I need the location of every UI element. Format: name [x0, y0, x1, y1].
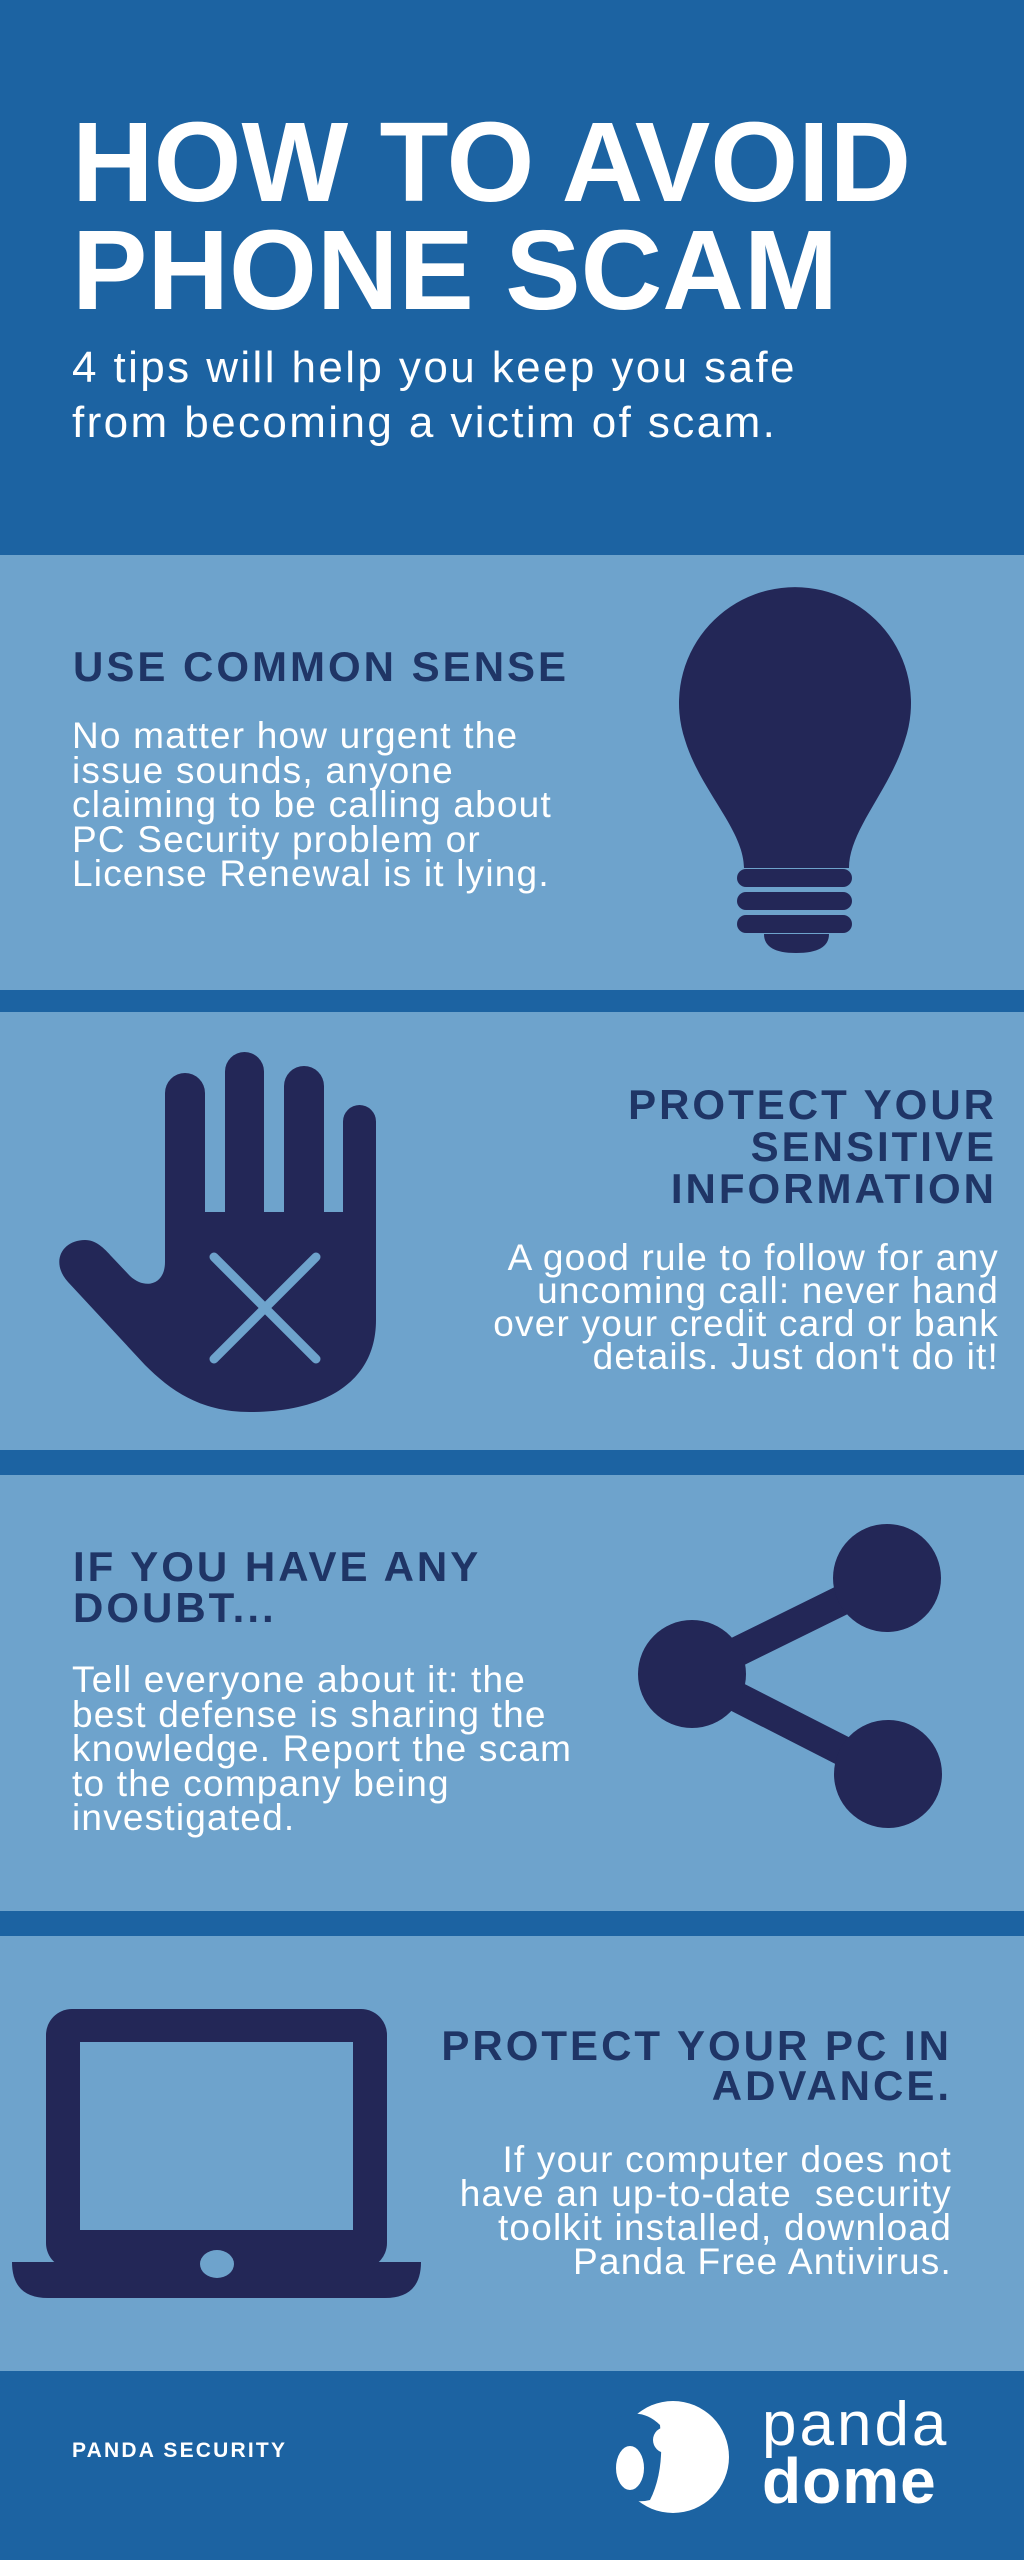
- heading: protect your pc: ADVANCE.: [712, 2062, 952, 2109]
- heading: protect your pc: [441, 2022, 952, 2109]
- header background: [0, 0, 1024, 555]
- heading: protect sensitive information: [628, 1081, 997, 1212]
- title: PHONE SCAM: [72, 207, 838, 333]
- text: sensitive information: details. Just don't do it!: [593, 1336, 999, 1377]
- text: doubt: Tell everyone about it: the: [72, 1659, 526, 1700]
- logo: panda dome: panda: [762, 2390, 949, 2459]
- text: protect pc: If your computer does not: [502, 2139, 952, 2180]
- divider strip: [0, 1911, 1024, 1936]
- text: doubt: best defense is sharing the: [72, 1694, 547, 1734]
- text: common sense: [72, 715, 552, 894]
- logo: panda dome: [616, 2390, 949, 2517]
- text: common sense: No matter how urgent the: [72, 715, 518, 756]
- text: protect pc: Panda Free Antivirus.: [573, 2241, 952, 2282]
- title: [72, 99, 911, 333]
- text: common sense: claiming to be calling about: [72, 784, 552, 825]
- text: sensitive information: A good rule to follow for any: [508, 1237, 999, 1278]
- text: common sense: License Renewal is it lying.: [72, 853, 550, 894]
- icon: laptop: [12, 2009, 421, 2298]
- divider strip: [0, 1450, 1024, 1475]
- text: sensitive information: uncoming call: never hand: [537, 1270, 999, 1311]
- subtitle: from becoming a victim of scam.: [72, 398, 777, 447]
- icon: light bulb: [679, 587, 911, 953]
- heading: use common sense: USE COMMON SENSE: [73, 643, 569, 690]
- text: protect pc: have an up-to-date security: [460, 2173, 952, 2214]
- heading: if you have any doubt: DOUBT...: [73, 1584, 277, 1631]
- heading: protect your pc: PROTECT YOUR PC IN: [441, 2022, 952, 2069]
- footer brand text: PANDA SECURITY: [72, 2439, 287, 2462]
- text: common sense: issue sounds, anyone: [72, 750, 454, 790]
- subtitle: [72, 343, 797, 447]
- text: doubt: to the company being: [72, 1762, 450, 1804]
- title: HOW TO AVOID: [72, 99, 911, 225]
- text: sensitive information: [493, 1237, 999, 1377]
- heading: protect sensitive information: SENSITIVE: [751, 1123, 997, 1170]
- text: doubt: investigated.: [72, 1797, 295, 1838]
- heading: protect sensitive information: INFORMATION: [671, 1165, 997, 1212]
- heading: if you have any doubt: [73, 1543, 481, 1631]
- text: doubt: [72, 1659, 572, 1838]
- text: protect pc: toolkit installed, download: [498, 2207, 952, 2248]
- logo: panda dome: dome: [762, 2445, 937, 2517]
- subtitle: 4 tips will help you keep you safe: [72, 343, 797, 392]
- text: protect pc: [460, 2139, 952, 2282]
- text: sensitive information: over your credit card or bank: [493, 1303, 999, 1344]
- divider strip: [0, 990, 1024, 1012]
- icon: stop hand: [59, 1052, 376, 1412]
- text: common sense: PC Security problem or: [72, 818, 481, 860]
- heading: protect sensitive information: PROTECT YOUR: [628, 1081, 997, 1128]
- footer: [0, 2371, 1024, 2560]
- icon: share: [638, 1524, 942, 1828]
- heading: if you have any doubt: IF YOU HAVE ANY: [73, 1543, 481, 1590]
- text: doubt: knowledge. Report the scam: [72, 1728, 572, 1769]
